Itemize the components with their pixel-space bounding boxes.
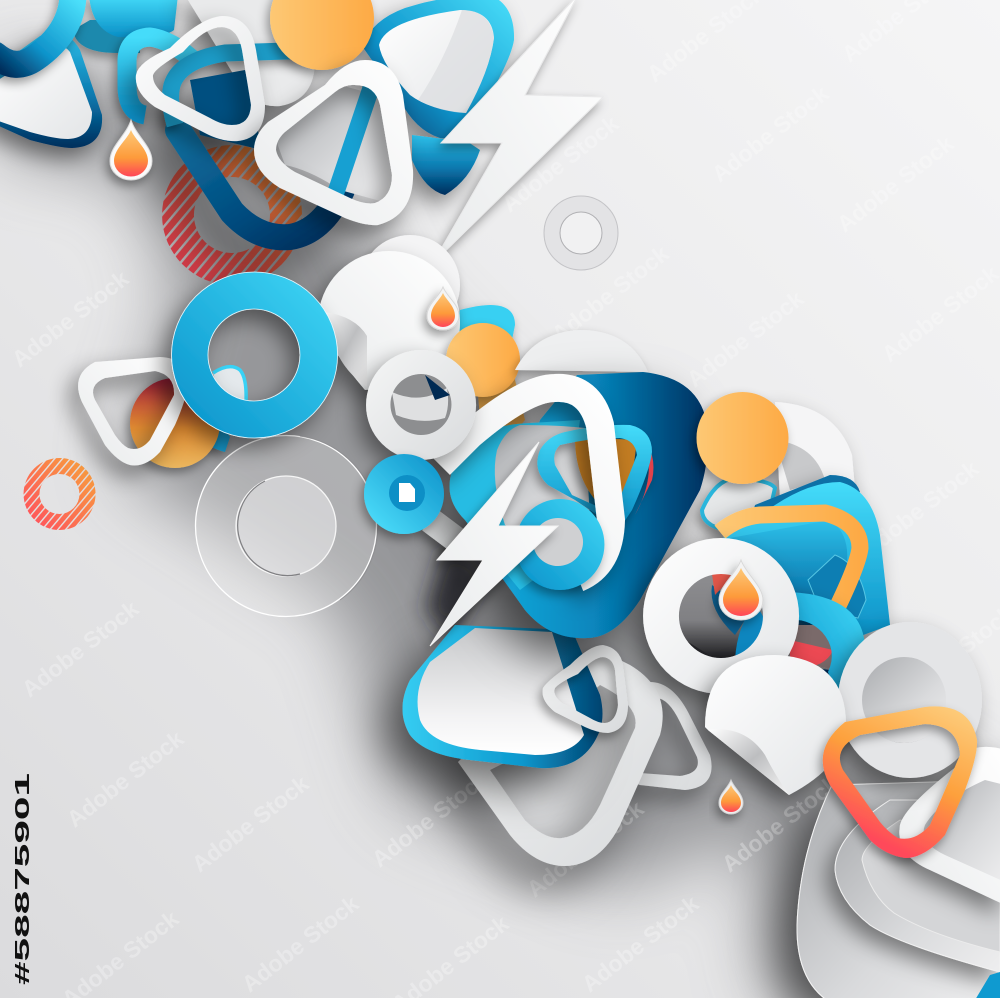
watermark: Adobe Stock: Adobe Stock [62,725,189,832]
circle: right orange [696,392,788,484]
panel: blue bottom-right corner [975,972,1000,1000]
image id: #58875901 [12,773,34,985]
panel: lower white triangle with blue border [402,625,602,768]
ribbon: white band over big blue [440,388,611,578]
striped ring: small [24,458,96,530]
circle: mid orange [446,323,520,397]
ribbon: small cyan loop [127,37,195,115]
circle: red-orange behind left ring [130,378,220,468]
triangle ring: orange-red [823,706,977,858]
watermark: Adobe Stock: Adobe Stock [707,80,834,187]
triangle ring: small white [136,16,265,141]
thin outline ring, large [196,436,378,616]
triangle ring: left white [78,357,188,465]
icon: lightning bolt, large [433,0,603,263]
icon: lightning bolt, centre [430,442,558,646]
panel: light grey paper behind top rings [185,0,315,106]
watermark: Adobe Stock: Adobe Stock [367,765,494,872]
watermark: Adobe Stock: Adobe Stock [577,890,704,997]
circle: cyan with document icon [364,454,444,534]
panel: top-left teal tab [73,0,178,53]
watermark: Adobe Stock: Adobe Stock [17,595,144,702]
panel: big blue rounded triangle [449,372,708,638]
watermark: Adobe Stock: Adobe Stock [877,260,1000,367]
ribbon: cyan arc in blue ring hole [213,367,246,402]
panel: grey triangle ring, lower right [601,682,712,790]
watermark: Adobe Stock: Adobe Stock [857,455,984,562]
ring: large blue [172,272,338,438]
ribbon: teal band through the rings [171,50,320,125]
watermark: Adobe Stock: Adobe Stock [237,890,364,997]
watermark: Adobe Stock: Adobe Stock [547,240,674,347]
watermark: Adobe Stock: Adobe Stock [522,795,649,902]
panel: small cyan-edged paper [702,478,775,530]
watermark: Adobe Stock: Adobe Stock [717,770,844,877]
icon: drop top-left [110,120,152,180]
panel: top paper behind centre blue [515,330,648,372]
watermark: Adobe Stock: Adobe Stock [832,130,959,237]
ribbon: teal strip through large ring [335,85,372,195]
circle: peeled white sticker [318,251,460,390]
panel: white-grey triangle ring, bottom [458,650,663,866]
panel: bottom-right large paper square [797,780,1000,1000]
ring: grey-white centre [366,350,476,460]
panel: right cyan triangle with orange ribbon [720,475,890,640]
ring: large white with hole [643,538,799,694]
icon: large drop [719,560,763,620]
panel: grey paper behind orange circle [775,402,856,500]
panel: grey paper inside large triangle [276,85,395,205]
triangle ring: cyan with orange interior [537,425,654,525]
panel: peeled white sticker lower [705,655,846,795]
ribbon: large dark blue triangle band [178,70,342,237]
panel: top-left white triangle with blue border [0,33,102,148]
panel: paper circle behind centre [360,235,515,350]
thin outline ring, small [544,196,618,270]
watermark: Adobe Stock: Adobe Stock [497,110,624,217]
ribbon: top-left blue U [0,0,73,64]
ring: cyan curl [515,499,604,590]
panel: top-right blue triangle [362,0,514,195]
watermark: Adobe Stock: Adobe Stock [682,285,809,392]
panel: triangular blue wedge behind small left ring [178,400,230,452]
striped ring: large red-orange [162,145,302,285]
triangle ring: large white [254,60,413,225]
icon: small drop [719,780,743,814]
circle: top orange [270,0,374,70]
panel: light interior of bottom triangle ring [490,685,636,838]
ring: blue arc with dark interior [785,592,865,705]
ring: grey circle right [838,622,982,778]
icon: drop on white sticker [427,287,459,330]
panel: bottom-right inner paper square [835,800,1000,972]
panel: dark shadow under lightning [425,545,490,640]
panel: bottom-right white ring [899,747,1000,905]
panel: orange lower half behind circle [478,368,525,438]
bottom white edge [0,998,1000,1000]
ribbon: white lower band below blue circle [430,520,470,550]
triangle ring: small white [542,645,628,733]
icon: document [399,483,415,502]
watermark: Adobe Stock: Adobe Stock [187,770,314,877]
watermark: Adobe Stock: Adobe Stock [7,265,134,372]
